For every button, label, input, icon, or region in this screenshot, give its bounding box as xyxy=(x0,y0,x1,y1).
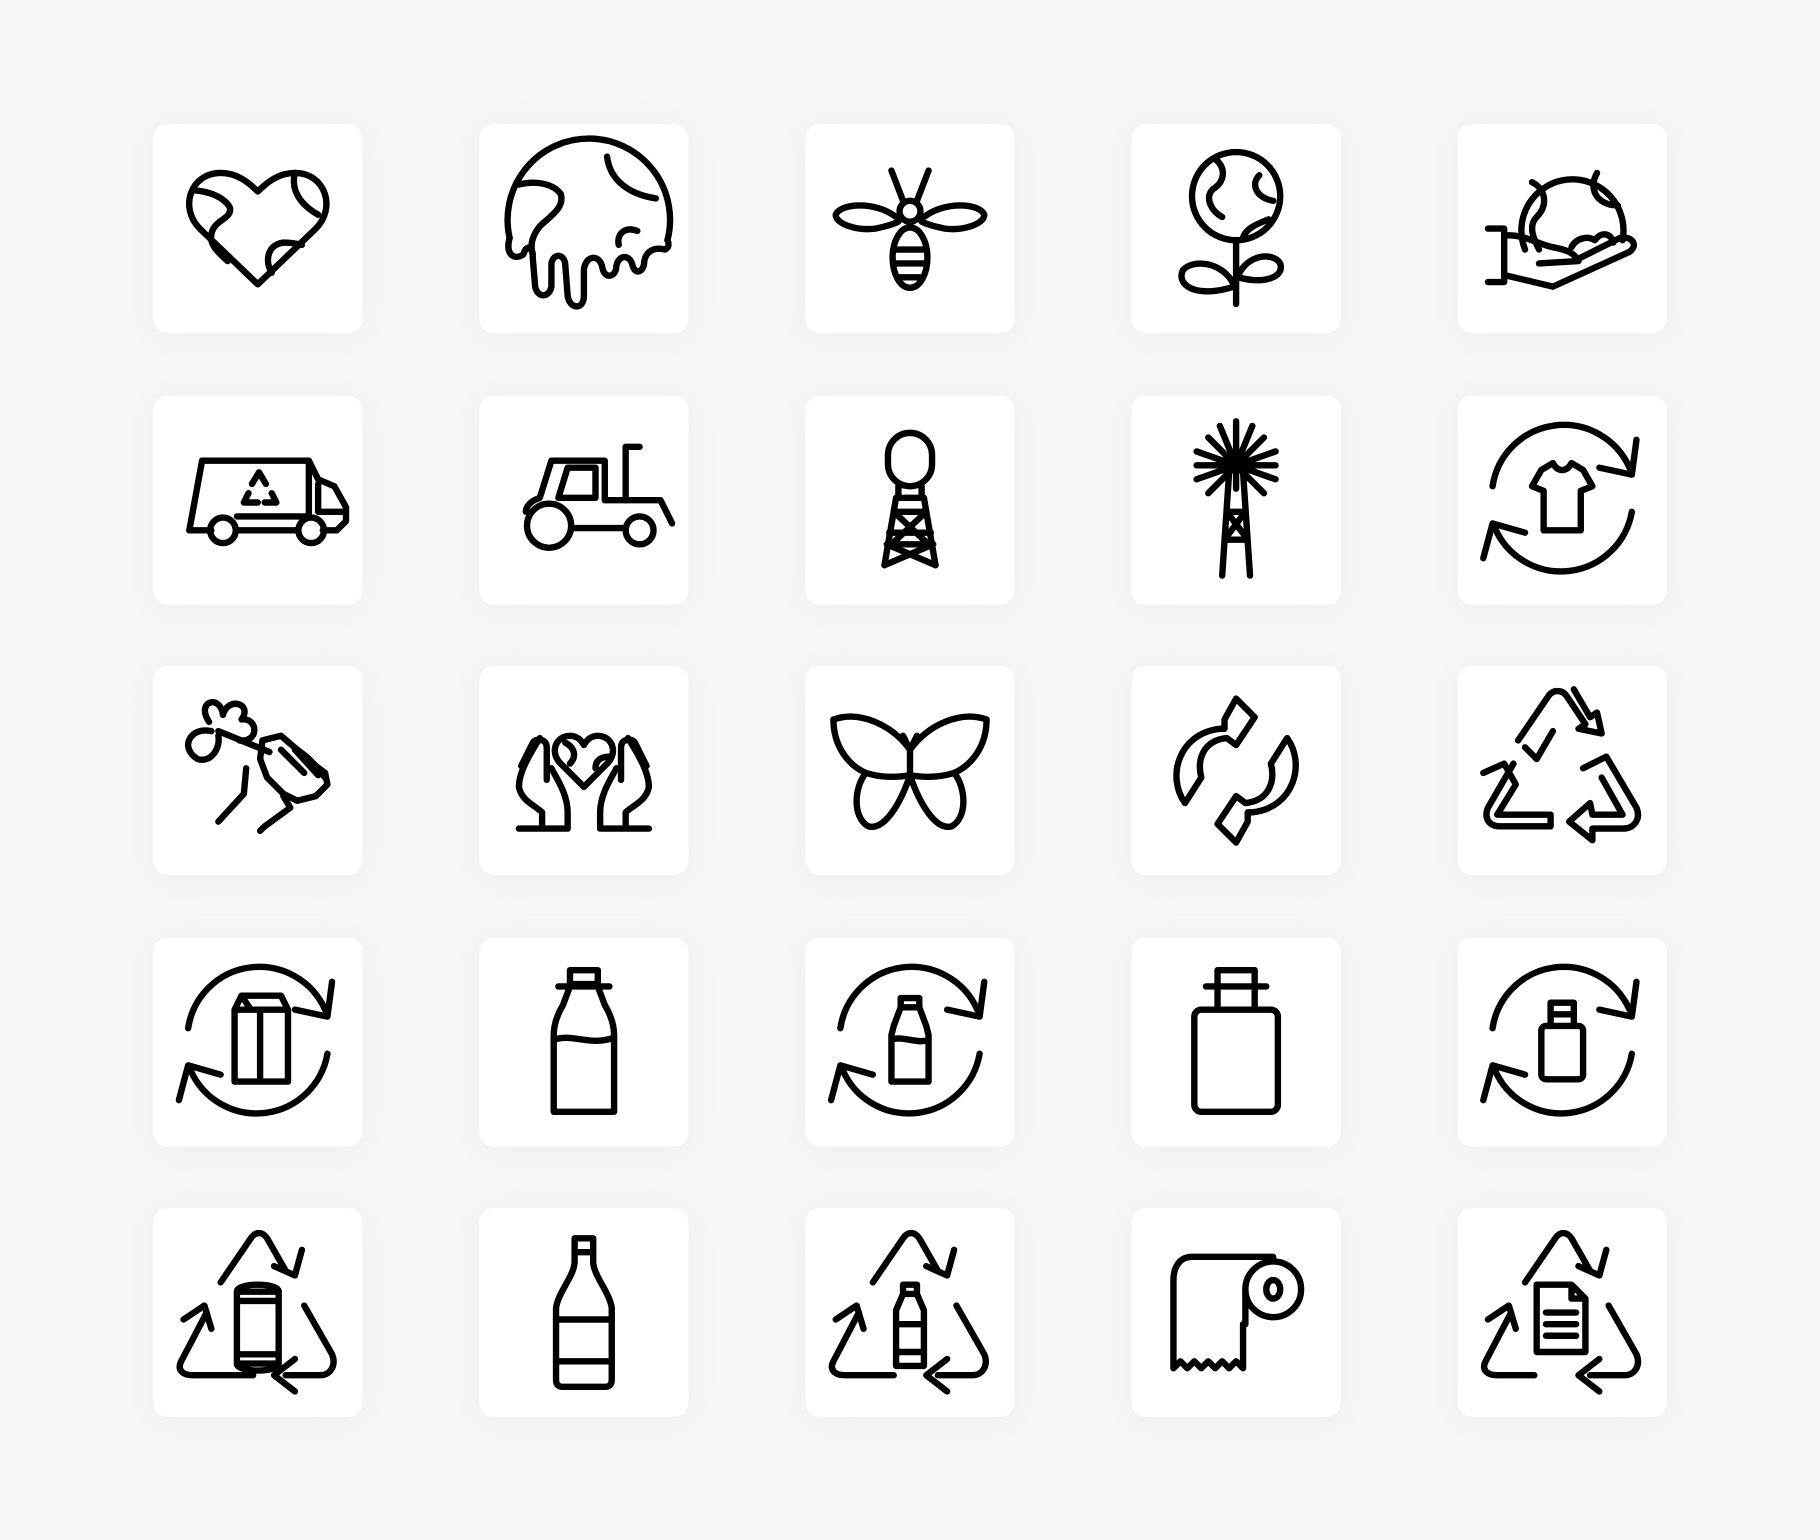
icon card: recycle bottle xyxy=(806,1208,1014,1417)
icon card: butterfly xyxy=(806,666,1014,875)
icon card: refresh arrows xyxy=(1132,666,1341,875)
icon card: water tower xyxy=(806,396,1014,605)
icon card: recycling truck xyxy=(153,396,362,605)
icon card: hands with heart xyxy=(479,666,688,875)
icon card: tall bottle xyxy=(479,1208,688,1417)
icon card: jar xyxy=(1132,938,1341,1147)
icon card: cycle with milk carton xyxy=(153,938,362,1147)
icon card: hand holding earth xyxy=(1458,124,1667,333)
icon card: windmill xyxy=(1132,396,1341,605)
icon card: cycle with shirt xyxy=(1458,396,1667,605)
icon card: milk bottle xyxy=(479,938,688,1147)
icon card: heart earth xyxy=(153,124,362,333)
icon card: melting globe xyxy=(479,124,688,333)
icon card: cycle with jar xyxy=(1458,938,1667,1147)
icon card: tractor xyxy=(479,396,688,605)
icon card: flower earth xyxy=(1132,124,1341,333)
icon card: bee xyxy=(806,124,1014,333)
icon card: toilet paper roll xyxy=(1132,1208,1341,1417)
icon card: cycle with bottle xyxy=(806,938,1014,1147)
icon card: recycle document xyxy=(1458,1208,1667,1417)
icon card: recycle can xyxy=(153,1208,362,1417)
icon card: recycle symbol xyxy=(1458,666,1667,875)
icon card: plant in hand xyxy=(153,666,362,875)
